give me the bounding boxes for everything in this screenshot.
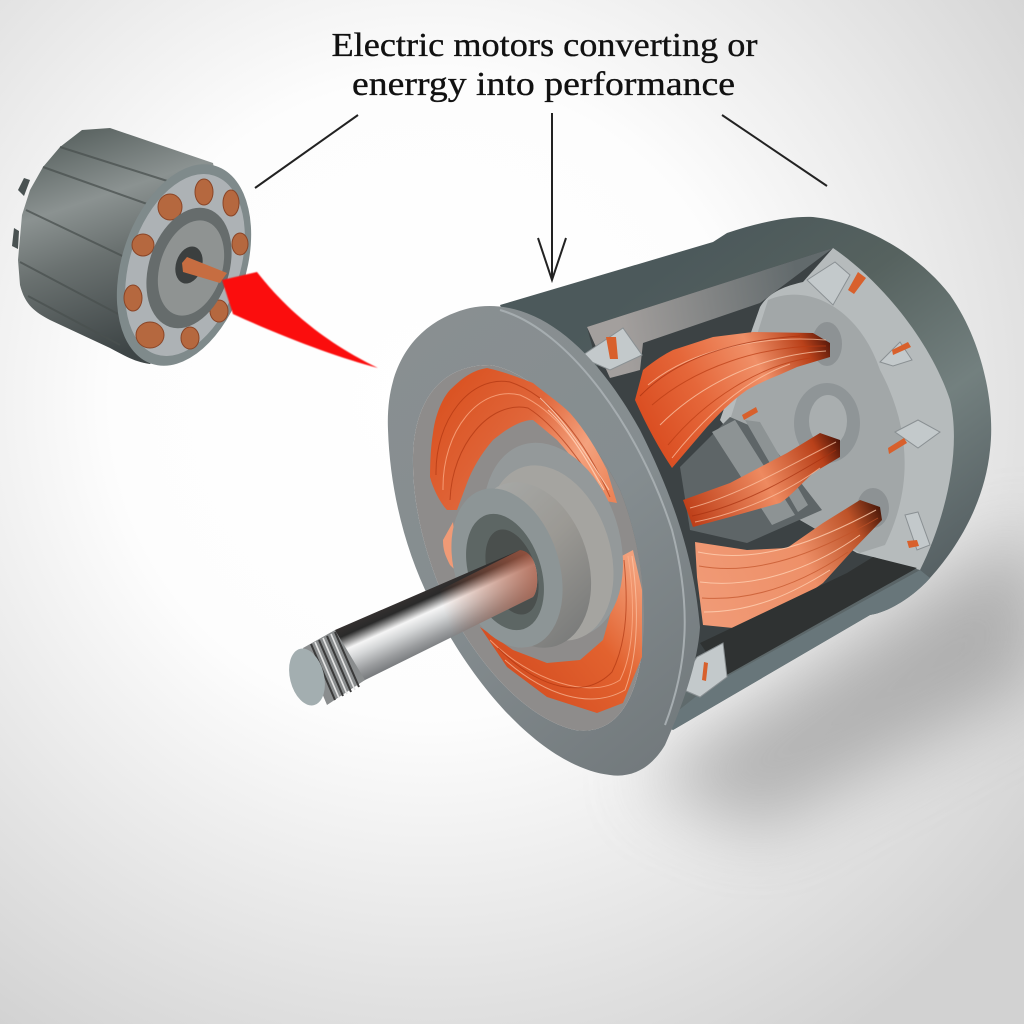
arrow: centre down arrow: [538, 113, 566, 280]
small motor body: [18, 128, 240, 364]
rear winding lower: [695, 500, 882, 628]
rear end plate: [720, 248, 954, 570]
red arrow: [222, 272, 378, 368]
title: Electric motors converting or: [332, 27, 758, 64]
front coil top: [430, 368, 617, 510]
front coil bottom: [480, 550, 642, 713]
arrow: left pointer line: [255, 115, 358, 188]
arrow: right pointer line: [722, 115, 827, 186]
hub body: [449, 466, 611, 664]
rear winding middle: [683, 433, 840, 527]
shaft thread: [303, 630, 365, 705]
housing bottom strip: [660, 570, 930, 730]
housing clips: [580, 262, 940, 697]
housing roof panel: [587, 248, 833, 378]
bearing: [452, 504, 558, 640]
end plate bosses: [794, 322, 889, 528]
inner stator steps: [680, 417, 822, 543]
rear winding top: [635, 332, 830, 468]
hole inner wall: [413, 365, 644, 731]
end plate centre disc: [730, 295, 905, 553]
small motor hub: [132, 197, 246, 339]
hub flange: [465, 449, 635, 657]
shaft: [335, 550, 537, 690]
small motor face: [93, 147, 275, 383]
title: [332, 27, 758, 103]
hub front face: [432, 474, 582, 662]
front copper coils: [430, 368, 642, 713]
small motor illustration: [12, 128, 275, 383]
bottom floor panel: [700, 557, 917, 677]
hub base plate: [459, 424, 647, 656]
small motor shaft: [182, 257, 227, 283]
ring bevel line: [500, 310, 685, 725]
clip copper tips: [606, 272, 919, 681]
main motor: [283, 217, 991, 776]
title: enerrgy into performance: [352, 66, 735, 103]
shaft tip: [283, 645, 331, 709]
front coil left sliver: [443, 522, 458, 573]
rear housing body: [500, 217, 991, 730]
inner cavity: [587, 248, 880, 687]
small motor coils: [124, 179, 248, 349]
motor shadow: [640, 530, 1024, 830]
rear copper windings: [635, 332, 882, 628]
front ring: [388, 306, 700, 776]
